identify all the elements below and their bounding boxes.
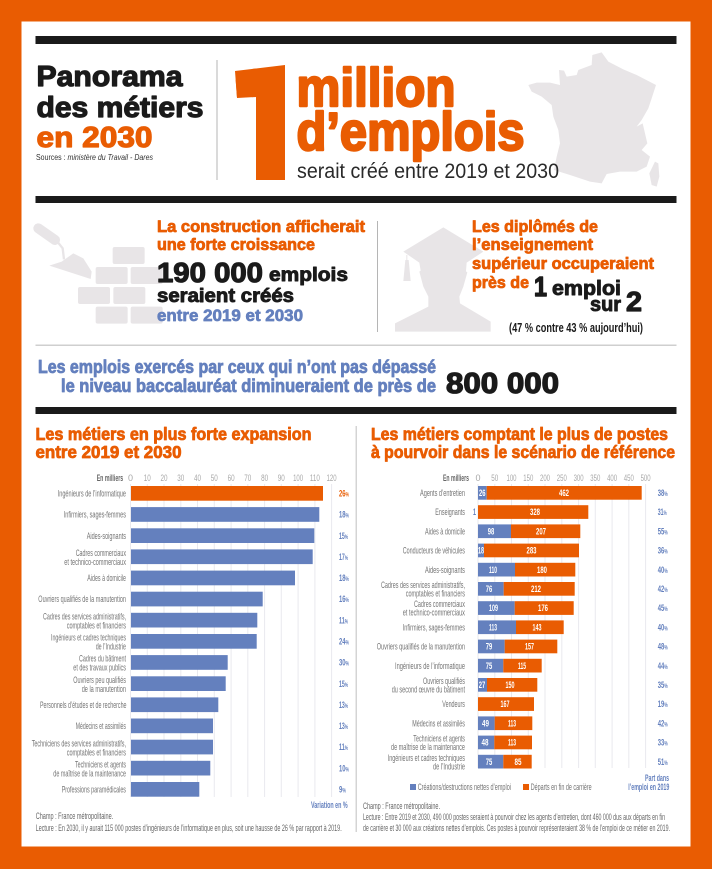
text: graduates: près de xyxy=(472,273,529,292)
bar chart: postes à pourvoir: 1 xyxy=(473,507,476,517)
bar chart: postes à pourvoir: du second œuvre du bâtiment xyxy=(392,684,465,696)
notes: left chart: Lecture : En 2030, il y aurait 115 000 postes d’ingénieurs de l’informatique en plus, soit une hausse de 26 % par rapport à 2019. xyxy=(36,823,342,834)
icon: trowel and bricks xyxy=(38,228,163,324)
legend: Départs en fin de carrière xyxy=(531,782,592,793)
text: construction: entre 2019 et 2030 xyxy=(157,306,303,325)
bar chart: postes à pourvoir: 250 xyxy=(557,473,567,483)
bar chart: expansion xyxy=(32,473,349,810)
title xyxy=(36,61,204,154)
bar chart: expansion: Personnels d’études et de recherche xyxy=(40,700,127,711)
bar chart: postes à pourvoir: Ouvriers qualifiés xyxy=(423,676,465,687)
bar chart: postes à pourvoir: 45% xyxy=(658,603,668,613)
text: graduates: sur xyxy=(590,294,621,316)
bar chart: expansion: 16% xyxy=(339,594,349,604)
bar chart: postes à pourvoir: 113 xyxy=(508,738,516,748)
bar chart: postes à pourvoir: 150 xyxy=(523,473,533,483)
bar chart: postes à pourvoir: 115 xyxy=(518,661,526,671)
bar chart: postes à pourvoir: 19% xyxy=(658,699,668,709)
bar chart: expansion: Infirmiers, sages-femmes xyxy=(64,510,126,521)
heading: right chart: à pourvoir dans le scénario de référence xyxy=(371,442,675,462)
headline: million d'emplois: million xyxy=(296,58,456,118)
bar chart: expansion: Variation en % xyxy=(311,800,348,810)
bar chart: postes à pourvoir: 300 xyxy=(574,473,584,483)
big number 1: 1 xyxy=(214,34,304,215)
bar chart: expansion: 26% xyxy=(339,488,349,498)
bar chart: expansion: En milliers xyxy=(97,473,123,484)
text: construction: La construction afficherait xyxy=(157,217,365,236)
bar chart: postes à pourvoir: 212 xyxy=(531,584,541,594)
text: graduates: supérieur occuperaient xyxy=(472,254,654,273)
bar chart: expansion: 70 xyxy=(244,473,251,483)
bar chart: expansion: Aides à domicile xyxy=(87,573,126,584)
bar chart: postes à pourvoir: Aides-soignants xyxy=(425,565,465,576)
bar chart: expansion: Ingénieurs et cadres techniques xyxy=(51,633,126,644)
bar chart: postes à pourvoir: 44% xyxy=(658,661,668,671)
text: graduates: emploi xyxy=(552,278,621,300)
bar chart: postes à pourvoir: 283 xyxy=(526,546,536,556)
text: construction: 190 000 xyxy=(157,257,263,288)
bar chart: expansion: et des travaux publics xyxy=(73,663,126,674)
bar chart: postes à pourvoir: 328 xyxy=(530,507,540,517)
bar chart: expansion: de la manutention xyxy=(82,684,126,695)
bar chart: expansion: Ouvriers peu qualifiés xyxy=(73,675,126,686)
bar chart: postes à pourvoir: 75 xyxy=(486,661,492,671)
bar chart: postes à pourvoir: Ouvriers qualifiés de la manutention xyxy=(377,642,465,653)
bar chart: postes à pourvoir: 51% xyxy=(658,757,668,767)
bar chart: postes à pourvoir: de maîtrise de la maintenance xyxy=(391,742,465,753)
bar chart: postes à pourvoir: 110 xyxy=(489,565,497,575)
text: construction: une forte croissance xyxy=(157,235,315,254)
bar chart: postes à pourvoir: 180 xyxy=(537,565,547,575)
bar chart: postes à pourvoir: 33% xyxy=(658,738,668,748)
bar chart: expansion: 100 xyxy=(293,473,303,483)
bar chart: expansion: 18% xyxy=(339,510,349,520)
bar chart: expansion: 30% xyxy=(339,658,349,668)
icon: map of France xyxy=(528,52,659,187)
bar chart: postes à pourvoir: Enseignants xyxy=(435,507,465,518)
bar chart: postes à pourvoir: 167 xyxy=(500,699,510,709)
bar chart: postes à pourvoir: 31% xyxy=(658,507,667,517)
bar chart: expansion: Aides-soignants xyxy=(87,531,126,542)
bar chart: expansion: 60 xyxy=(228,473,235,483)
notes: left chart xyxy=(36,811,342,834)
bar chart: expansion: 40 xyxy=(194,473,201,483)
bar chart: postes à pourvoir: 36% xyxy=(658,546,668,556)
notes: right chart: Champ : France métropolitaine. xyxy=(363,801,440,812)
bar chart: postes à pourvoir: 27 xyxy=(479,680,485,690)
bar chart: expansion: Cadres commerciaux xyxy=(76,548,126,559)
bar chart: expansion: 11% xyxy=(339,615,348,625)
bar chart: postes à pourvoir: 42% xyxy=(658,584,668,594)
bar chart: postes à pourvoir: et technico-commerciaux xyxy=(403,608,465,619)
bar chart: expansion: Ingénieurs de l’informatique xyxy=(58,488,126,500)
bar chart: postes à pourvoir: 113 xyxy=(508,718,516,728)
bar chart: postes à pourvoir: 42% xyxy=(658,718,668,728)
bar chart: postes à pourvoir: 100 xyxy=(506,473,516,483)
bar chart: postes à pourvoir: Cadres commerciaux xyxy=(414,599,465,610)
bar chart: expansion: Techniciens des services administratifs, xyxy=(32,738,126,749)
heading: right chart: Les métiers comptant le plus de postes xyxy=(371,424,668,444)
bar chart: postes à pourvoir: 26 xyxy=(479,488,486,498)
bar chart: postes à pourvoir: 85 xyxy=(514,757,522,767)
bar chart: expansion: 13% xyxy=(339,700,348,710)
bar chart: expansion: 15% xyxy=(339,531,348,541)
bar chart: expansion: de l’Industrie xyxy=(96,642,126,653)
bar chart: expansion: comptables et financiers xyxy=(67,747,126,758)
bar chart: postes à pourvoir: Conducteurs de véhicules xyxy=(403,546,465,557)
text: construction: seraient créés xyxy=(157,286,294,307)
bar chart: postes à pourvoir: Techniciens et agents xyxy=(413,734,465,745)
bar chart: expansion: Cadres du bâtiment xyxy=(79,654,126,665)
icon: graduate xyxy=(395,227,491,332)
bar chart: expansion: comptables et financiers xyxy=(67,620,126,631)
bar chart: expansion: Techniciens et agents xyxy=(75,759,126,770)
bar chart: postes à pourvoir: 98 xyxy=(488,526,494,536)
bar chart: expansion: Cadres des services administratifs, xyxy=(43,611,126,622)
bar chart: expansion: de maîtrise de la maintenance xyxy=(53,768,126,779)
bar chart: postes à pourvoir: 18 xyxy=(478,546,484,556)
text: graduates: Les diplômés de xyxy=(472,217,598,236)
bar chart: postes à pourvoir: 49 xyxy=(482,718,489,728)
bar chart: postes à pourvoir: 157 xyxy=(525,642,534,652)
bar chart: expansion: 9% xyxy=(339,784,346,794)
heading: right chart xyxy=(371,424,675,462)
text: graduates: (47 % contre 43 % aujourd’hui) xyxy=(509,320,643,335)
bar chart: postes à pourvoir: 79 xyxy=(486,642,492,652)
bar chart: postes à pourvoir: 143 xyxy=(532,622,542,632)
text: baccalauréat xyxy=(38,357,559,400)
text: baccalauréat: le niveau baccalauréat diminueraient de près de xyxy=(61,376,436,396)
bar chart: postes à pourvoir: 200 xyxy=(540,473,550,483)
bar chart: postes à pourvoir: Aides à domicile xyxy=(425,526,465,537)
bar chart: expansion: 18% xyxy=(339,573,349,583)
bar chart: expansion: 50 xyxy=(211,473,218,483)
bar chart: postes à pourvoir: 48% xyxy=(658,642,668,652)
bar chart: postes à pourvoir: Cadres des services administratifs, xyxy=(381,580,465,591)
text: graduates xyxy=(472,217,654,335)
heading: left chart: entre 2019 et 2030 xyxy=(36,442,182,462)
heading: left chart: Les métiers en plus forte expansion xyxy=(36,424,312,444)
bar chart: postes à pourvoir: Agents d’entretien xyxy=(420,488,465,499)
bar chart: postes à pourvoir: 176 xyxy=(538,603,548,613)
text: graduates: 1 xyxy=(534,271,547,302)
text: baccalauréat: Les emplois exercés par ceux qui n’ont pas dépassé xyxy=(38,357,436,377)
text: graduates: 2 xyxy=(626,286,642,317)
bar chart: expansion: 30 xyxy=(177,473,184,483)
text: baccalauréat: 800 000 xyxy=(446,368,559,400)
bar chart: expansion: 10 xyxy=(144,473,151,483)
title: en 2030 xyxy=(36,122,152,154)
bar chart: postes à pourvoir: de l’Industrie xyxy=(433,761,465,772)
bar chart: postes à pourvoir: 48 xyxy=(482,738,488,748)
bar chart: postes à pourvoir: 40% xyxy=(658,565,668,575)
bar chart: postes à pourvoir: 40% xyxy=(658,622,668,632)
bar chart: expansion: 10% xyxy=(339,763,349,773)
legend: Créations/destructions nettes d’emploi xyxy=(418,782,511,793)
bar chart: postes à pourvoir: Médecins et assimilés xyxy=(412,718,465,729)
bar chart: expansion: 0 xyxy=(128,473,133,483)
bar chart: postes à pourvoir: Infirmiers, sages-femmes xyxy=(403,622,465,633)
bar chart: expansion: Professions paramédicales xyxy=(62,784,126,796)
text: graduates: l’enseignement xyxy=(472,235,593,254)
headline: million d'emplois: serait créé entre 2019 et 2030 xyxy=(297,160,559,183)
bar chart: expansion: Médecins et assimilés xyxy=(76,721,126,732)
bar chart: postes à pourvoir: Ingénieurs de l’informatique xyxy=(395,661,465,672)
headline: million d'emplois xyxy=(296,58,559,183)
bar chart: expansion: Ouvriers qualifiés de la manutention xyxy=(38,594,126,605)
bar chart: postes à pourvoir: En milliers xyxy=(443,473,469,484)
heading: left chart xyxy=(36,424,312,462)
title: Panorama xyxy=(36,61,183,93)
bar chart: postes à pourvoir: 150 xyxy=(506,680,514,690)
bar chart: postes à pourvoir: l’emploi en 2019 xyxy=(628,782,669,792)
bar chart: postes à pourvoir: 462 xyxy=(559,488,569,498)
title: des métiers xyxy=(36,92,204,124)
bar chart: postes à pourvoir: Ingénieurs et cadres techniques xyxy=(388,753,465,764)
bar chart: expansion: 15% xyxy=(339,679,348,689)
bar chart: expansion: 11% xyxy=(339,742,348,752)
bar chart: postes à pourvoir: 450 xyxy=(624,473,634,483)
bar chart: postes à pourvoir: 50 xyxy=(491,473,498,483)
bar chart: postes à pourvoir: Part dans xyxy=(645,773,669,783)
bar chart: postes à pourvoir: Vendeurs xyxy=(442,699,465,710)
bar chart: expansion: et technico-commerciaux xyxy=(64,557,126,568)
bar chart: expansion: 13% xyxy=(339,721,348,731)
bar chart: postes à pourvoir: 109 xyxy=(489,603,498,613)
bar chart: expansion: 20 xyxy=(160,473,168,483)
headline: million d'emplois: d’emplois xyxy=(296,102,524,162)
bar chart: postes à pourvoir: 400 xyxy=(607,473,617,483)
bar chart: postes à pourvoir: 113 xyxy=(489,622,497,632)
notes: right chart xyxy=(363,801,670,834)
bar chart: expansion: 90 xyxy=(278,473,285,483)
bar chart: expansion: 110 xyxy=(310,473,320,483)
bar chart: postes à pourvoir: comptables et financiers xyxy=(406,588,465,600)
bar chart: postes à pourvoir: 35% xyxy=(658,680,668,690)
bar chart: postes à pourvoir: 75 xyxy=(486,757,492,767)
text: construction xyxy=(157,217,365,325)
notes: left chart: Champ : France métropolitaine. xyxy=(36,811,113,822)
text: construction: emplois xyxy=(269,265,348,286)
bar chart: postes à pourvoir: 500 xyxy=(641,473,651,483)
bar chart: expansion: 17% xyxy=(339,552,348,562)
bar chart: expansion: 120 xyxy=(327,473,337,483)
bar chart: postes à pourvoir: 207 xyxy=(536,526,546,536)
bar chart: postes à pourvoir: 350 xyxy=(590,473,600,483)
bar chart: postes à pourvoir: 76 xyxy=(486,584,492,594)
bar chart: expansion: 80 xyxy=(261,473,268,483)
bar chart: postes à pourvoir xyxy=(377,473,669,792)
bar chart: postes à pourvoir: 0 xyxy=(475,473,481,483)
bar chart: postes à pourvoir: 38% xyxy=(658,488,668,498)
bar chart: postes à pourvoir: 55% xyxy=(658,526,668,536)
bar chart: expansion: 24% xyxy=(339,636,349,646)
sources: Sources : ministère du Travail - Dares xyxy=(36,153,153,162)
